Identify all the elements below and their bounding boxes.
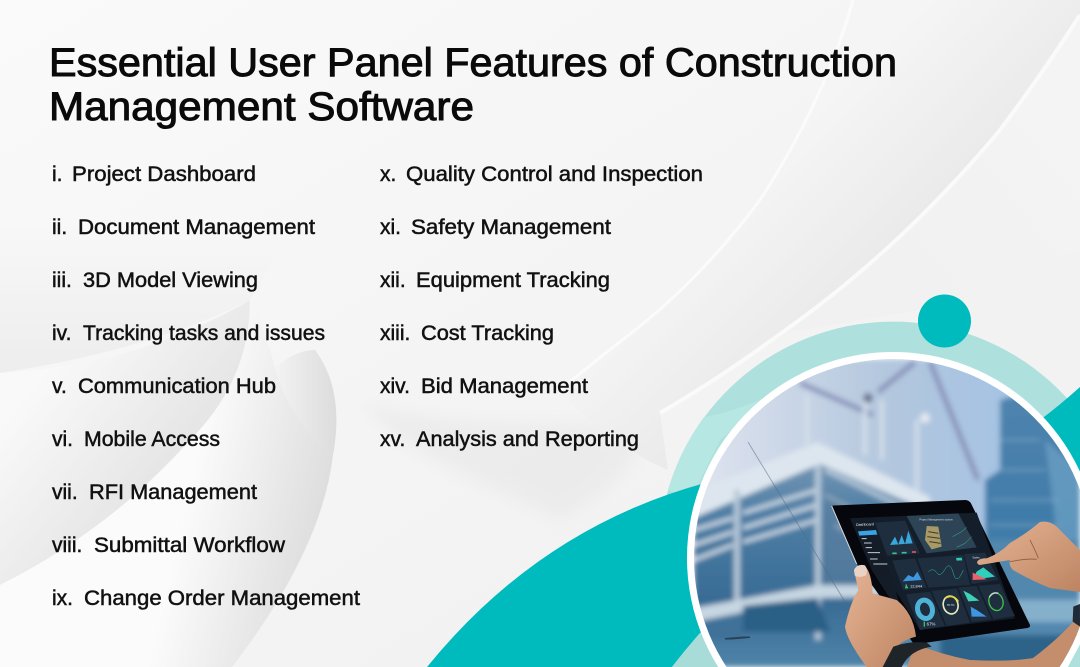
feature list column one: iv. xyxy=(52,322,71,345)
feature list column one: iii. xyxy=(52,269,72,292)
circular photo: tablet in front of construction site xyxy=(694,359,1080,667)
feature list column two: Analysis and Reporting xyxy=(416,428,639,451)
feature list column two: xiv. xyxy=(380,375,410,398)
panel charts: 67% xyxy=(927,621,935,626)
panel charts: 65.7% xyxy=(947,603,955,607)
title: Management Software xyxy=(49,85,474,129)
panel charts xyxy=(890,518,1005,627)
dashboard panels xyxy=(875,513,1015,630)
feature list column one: viii. xyxy=(52,534,82,557)
feature list column one: i. xyxy=(52,163,62,186)
feature list column two: xv. xyxy=(380,428,405,451)
feature list column two: Cost Tracking xyxy=(421,322,554,345)
light teal ring behind the photo xyxy=(658,322,1080,667)
panel charts: Project Management system xyxy=(919,518,954,522)
feature list column one: v. xyxy=(52,375,67,398)
feature list column two: xiii. xyxy=(380,322,410,345)
feature list column two: Quality Control and Inspection xyxy=(406,163,703,186)
white ring around the photo xyxy=(687,352,1080,667)
sidebar menu: Dashboard xyxy=(856,522,874,527)
teal wave bottom left xyxy=(427,483,720,667)
tablet with dashboard xyxy=(832,500,1030,643)
feature list column two: xi. xyxy=(380,216,401,239)
feature list column one: vi. xyxy=(52,428,73,451)
feature list column one: Change Order Management xyxy=(84,587,360,610)
forearms under the tablet xyxy=(907,618,1080,667)
panel charts: 12,844 xyxy=(910,583,923,588)
feature list column one: vii. xyxy=(52,481,78,504)
light teal sliver bottom xyxy=(672,625,730,667)
feature list column one: ii. xyxy=(52,216,67,239)
feature list column two: Equipment Tracking xyxy=(416,269,610,292)
feature list column two xyxy=(380,163,703,451)
title xyxy=(49,41,897,129)
wristwatch xyxy=(883,642,932,667)
feature list column one: Document Management xyxy=(78,216,315,239)
right hand with pointing finger xyxy=(977,522,1080,592)
feature list column one: Communication Hub xyxy=(78,375,276,398)
feature list column one: Submittal Workflow xyxy=(94,534,286,557)
feature list column one: Mobile Access xyxy=(84,428,220,451)
feature list column two: Bid Management xyxy=(421,375,588,398)
blurred construction site xyxy=(694,359,1080,667)
title: Essential User Panel Features of Construction xyxy=(49,41,897,85)
feature list column one xyxy=(52,163,360,610)
feature list column two: x. xyxy=(380,163,396,186)
panel charts: Sales xyxy=(972,556,980,560)
hands holding the tablet xyxy=(845,522,1080,667)
feature list column one: Tracking tasks and issues xyxy=(83,322,325,345)
feature list column one: 3D Model Viewing xyxy=(83,269,258,292)
left hand xyxy=(845,565,916,667)
teal wave right xyxy=(1040,387,1080,560)
feature list column one: ix. xyxy=(52,587,73,610)
feature list column two: xii. xyxy=(380,269,406,292)
teal dot xyxy=(918,294,971,348)
sidebar menu xyxy=(856,522,887,564)
feature list column one: Project Dashboard xyxy=(72,163,256,186)
feature list column two: Safety Management xyxy=(411,216,611,239)
feature list column one: RFI Management xyxy=(89,481,257,504)
